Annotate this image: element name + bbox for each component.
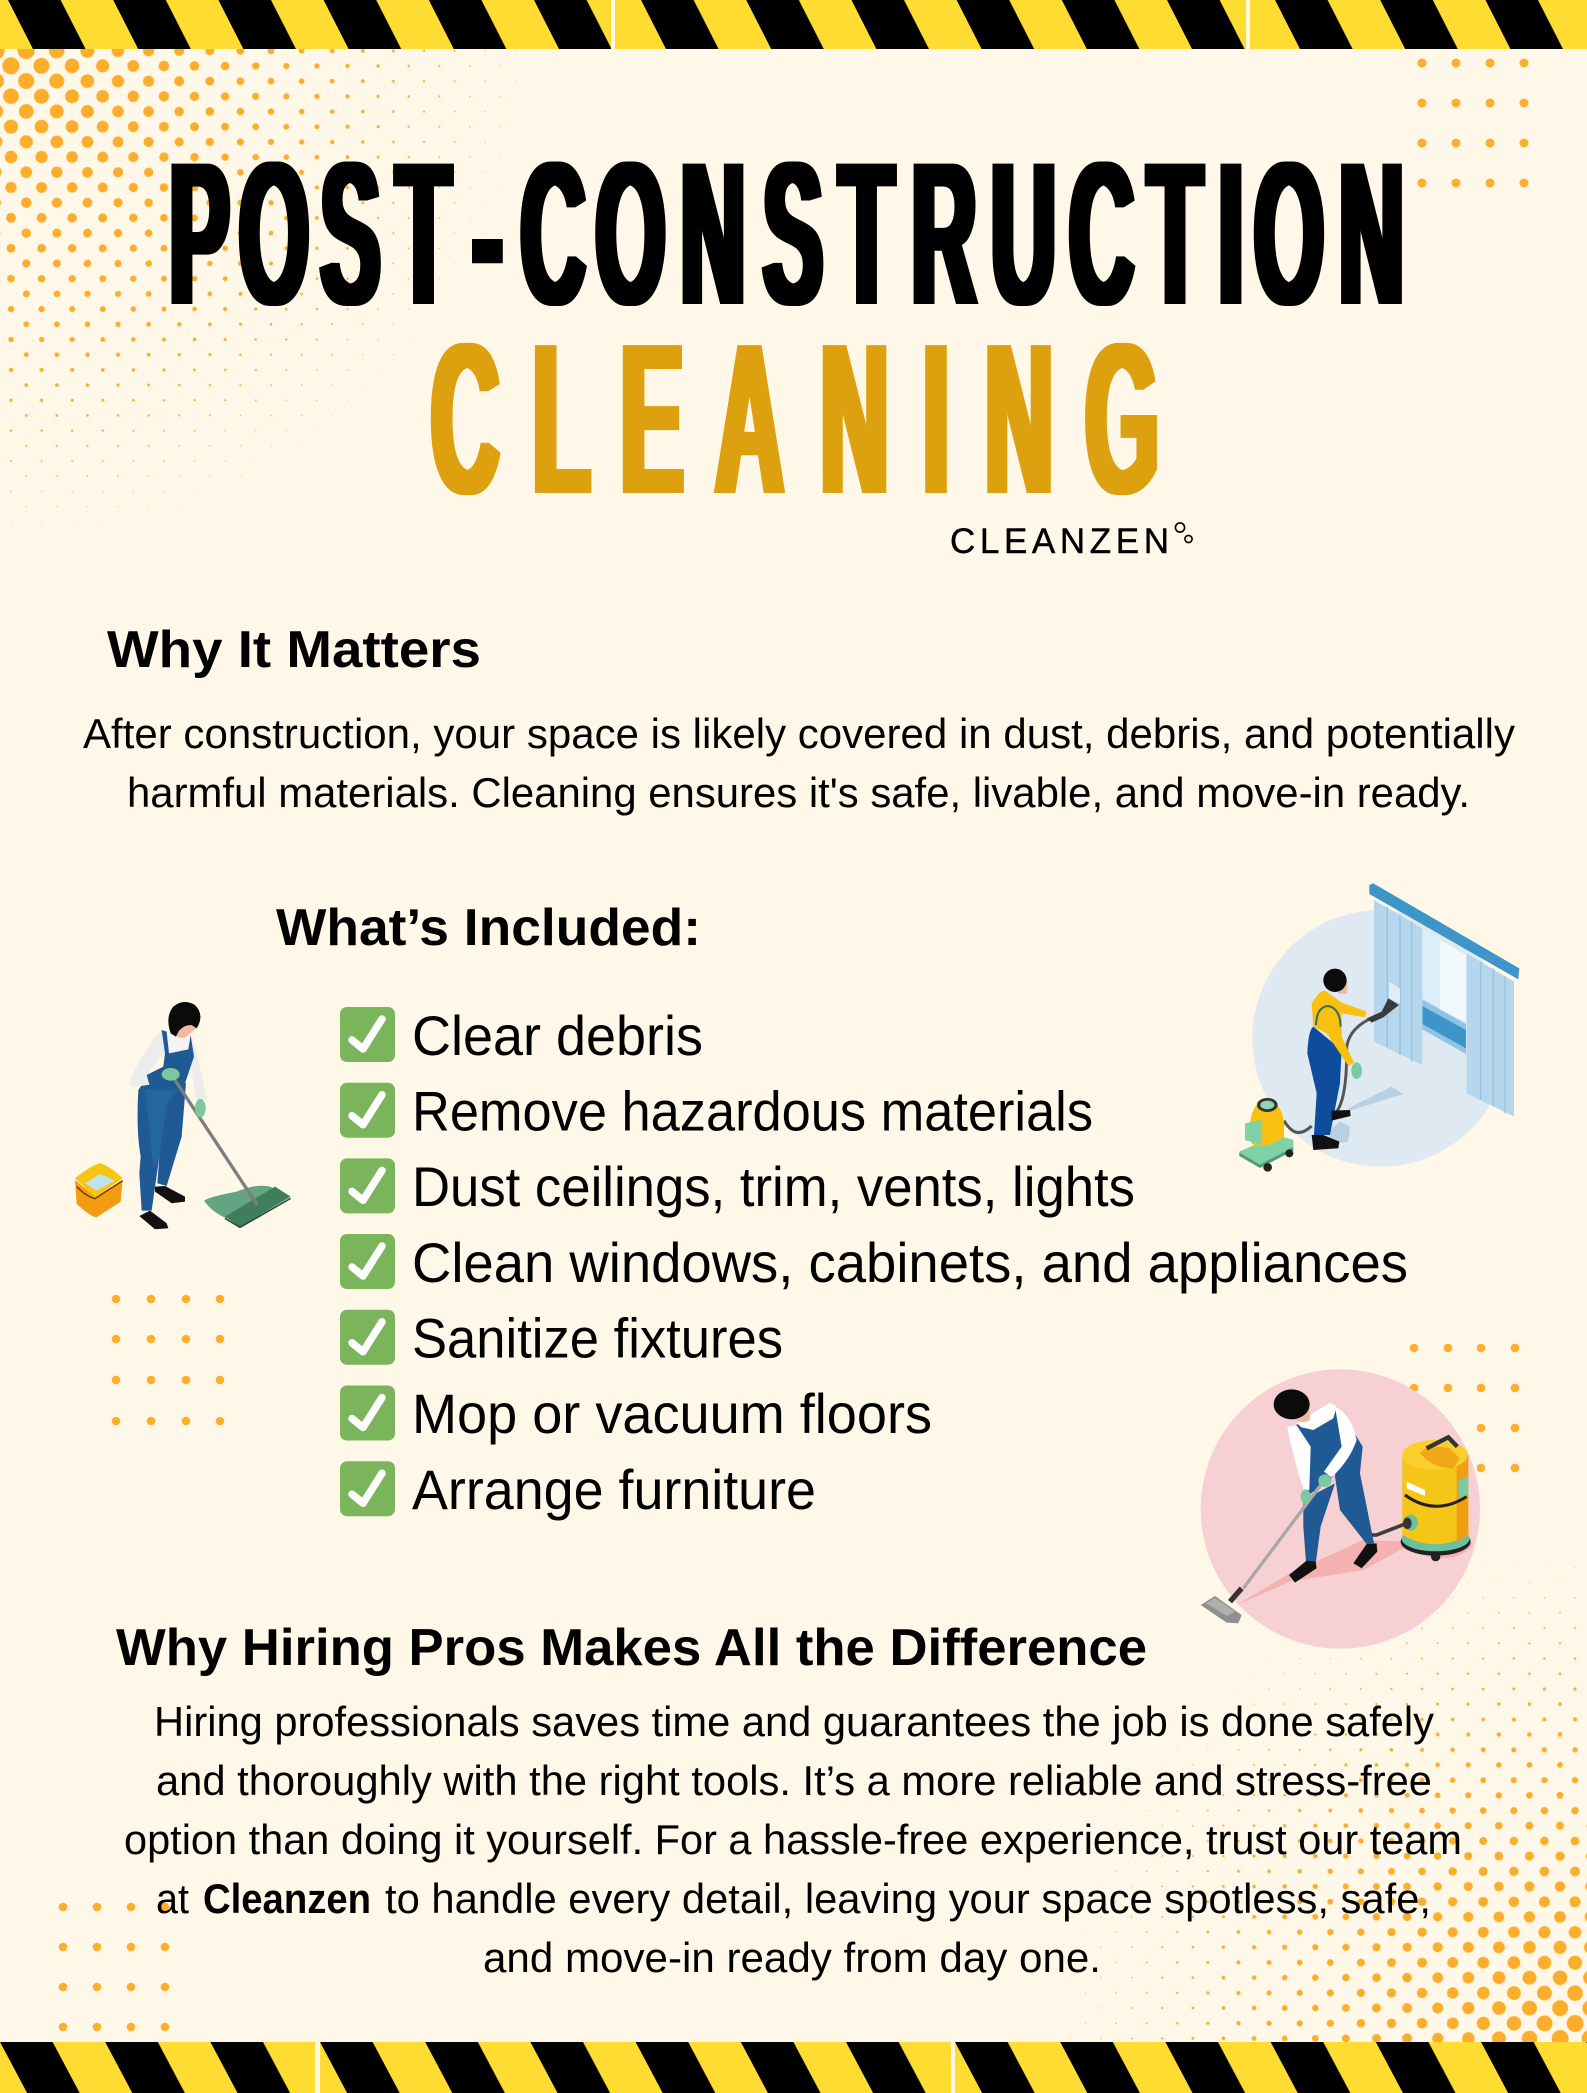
checklist: Arrange furniture [412,1458,816,1521]
illustration part: vacuum [1239,1098,1293,1172]
text block: why hiring pros: to handle every detail, leaving your space spotless, safe, [385,1875,1431,1922]
text block: why it matters: harmful materials. Cleaning ensures it's safe, livable, and move-in ready. [127,769,1470,816]
checklist: Mop or vacuum floors [412,1382,932,1445]
text block: why hiring pros: at [156,1875,189,1922]
illustration part: shadow [1327,1087,1403,1143]
illustration part: bucket [75,1163,123,1217]
illustration part: person [130,1002,257,1229]
illustration part: worker [1307,969,1367,1150]
checklist: Remove hazardous materials [412,1080,1093,1142]
text block: why hiring pros: and move-in ready from day one. [483,1934,1101,1981]
illustration: man vacuuming floor [1201,1369,1480,1649]
title: cleaning: CLEANING [431,300,1159,540]
checklist [340,1004,1408,1521]
illustration: woman mopping [75,1002,291,1229]
illustration part: blue circle [1252,910,1509,1167]
checklist: Clean windows, cabinets, and appliances [412,1231,1408,1294]
illustration part: vacuum cleaner [1401,1437,1471,1561]
text block: why hiring pros: Cleanzen [203,1875,371,1922]
illustration part: pink circle [1201,1369,1480,1649]
hazard stripe: top [0,0,1587,49]
illustration part: mop head [204,1186,291,1227]
dot grid: left middle [112,1295,224,1425]
halftone dots: bottom right [1047,1542,1587,2042]
hazard stripe: bottom [0,2042,1587,2093]
logo: cleanzen: CLEANZEN [950,522,1169,561]
heading: what's included: What’s Included: [276,899,701,957]
title: post-construction: POST-CONSTRUCTION [169,120,1404,348]
dot grid: top right [1418,58,1528,188]
illustration part: hose and nozzle [1284,998,1399,1133]
checklist: Clear debris [412,1004,703,1067]
dot grid: bottom left [59,1903,169,2031]
text block: why hiring pros [124,1698,1462,1981]
illustration: worker vacuuming curtains [1239,883,1519,1172]
illustration part: hose [1340,1472,1418,1535]
illustration part: shadow [1237,1540,1473,1605]
text block: why it matters: After construction, your space is likely covered in dust, debris, and potentially [83,710,1515,757]
halftone dots: top left [0,49,540,549]
text block: why hiring pros: and thoroughly with the right tools. It’s a more reliable and stress-free [156,1757,1432,1804]
text block: why hiring pros: Hiring professionals saves time and guarantees the job is done safely [154,1698,1434,1745]
text block: why hiring pros: option than doing it yourself. For a hassle-free experience, trust our team [124,1816,1462,1863]
text block: why it matters [83,710,1515,816]
checklist: Sanitize fixtures [412,1306,783,1370]
heading: why hiring pros: Why Hiring Pros Makes All the Difference [116,1619,1147,1677]
illustration part: man [1201,1389,1377,1623]
checklist: Dust ceilings, trim, vents, lights [412,1155,1135,1218]
dot grid: right middle [1410,1344,1519,1472]
illustration part: window and curtains [1369,883,1519,1117]
heading: why it matters: Why It Matters [107,621,481,679]
